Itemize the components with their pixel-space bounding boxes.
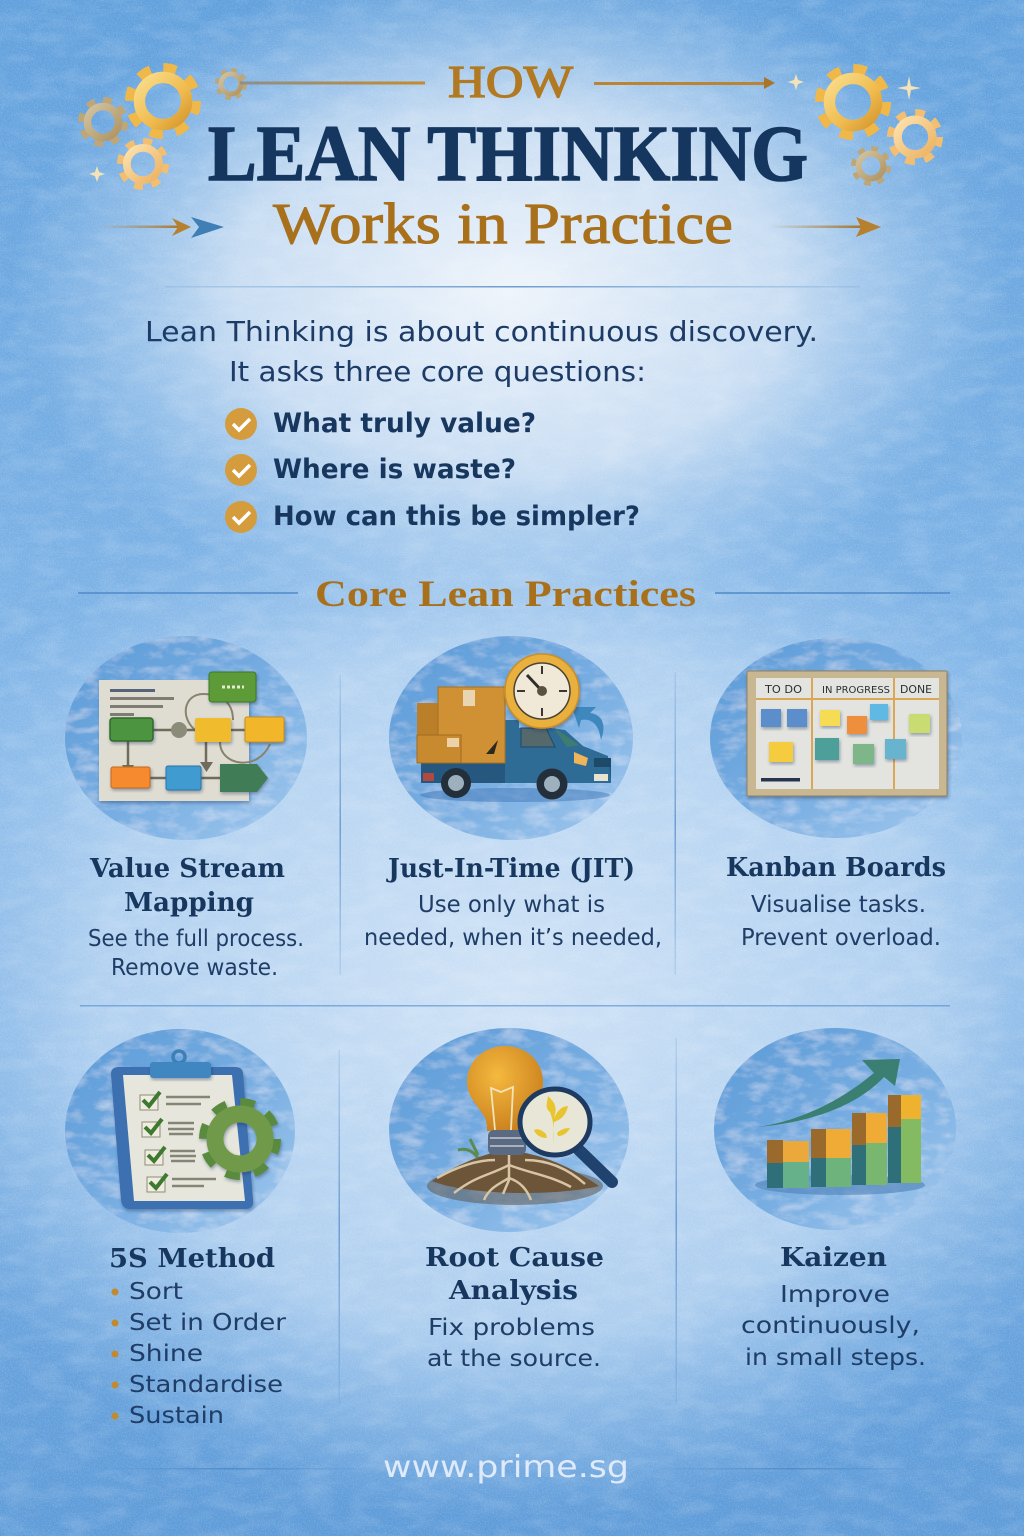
card title: Kanban Boards xyxy=(726,853,946,883)
card description: Prevent overload. xyxy=(741,925,941,951)
bullet list: Set in Order xyxy=(129,1310,287,1336)
panel: value stream mapping xyxy=(65,636,307,981)
icon: kanban board xyxy=(747,671,947,796)
card description: needed, when it’s needed, xyxy=(364,925,662,951)
card title: Kaizen xyxy=(780,1243,887,1273)
card description: Fix problems xyxy=(428,1315,595,1341)
card description: at the source. xyxy=(427,1346,601,1372)
card description: See the full process. xyxy=(88,926,304,952)
heading: Works in Practice: Works in Practice xyxy=(273,191,733,256)
card description: in small steps. xyxy=(745,1345,926,1371)
card title xyxy=(89,854,285,918)
card description: Improve xyxy=(780,1282,890,1308)
card title: Value Stream xyxy=(89,854,285,884)
icon: process map xyxy=(99,672,284,801)
arrow: top right xyxy=(594,77,775,89)
icon: check 3 xyxy=(225,501,257,533)
sparkles xyxy=(89,74,921,182)
section heading: Core Lean Practices xyxy=(315,574,696,615)
card title: 5S Method xyxy=(109,1244,275,1274)
card description xyxy=(741,892,941,951)
bullet list: Shine xyxy=(129,1341,203,1367)
panel: kaizen xyxy=(714,1028,956,1371)
title block xyxy=(82,56,939,256)
card description: Remove waste. xyxy=(111,955,278,981)
bullet list: Sort xyxy=(129,1279,183,1305)
icon: rising bar chart with arrow xyxy=(755,1059,925,1195)
icon: check 1 xyxy=(225,408,257,440)
card description xyxy=(364,892,662,951)
question 2: Where is waste? xyxy=(273,454,516,485)
card description xyxy=(88,926,304,981)
icon: check 2 xyxy=(225,454,257,486)
icon: kanban board: TO DO xyxy=(764,684,802,696)
dividers xyxy=(80,672,950,1405)
icon: kanban board: DONE xyxy=(900,684,932,696)
card title: Just-In-Time (JIT) xyxy=(386,854,635,884)
icon: clipboard with gear xyxy=(111,1051,275,1209)
icon: light bulb, roots, magnifier xyxy=(427,1046,612,1205)
gear xyxy=(205,1104,275,1174)
panel: just in time xyxy=(364,636,662,951)
card description xyxy=(427,1315,601,1372)
question list xyxy=(225,408,640,533)
arrow: lower left with chevron xyxy=(97,217,224,238)
bullet list: Standardise xyxy=(129,1372,283,1398)
icon: kanban board: IN PROGRESS xyxy=(822,685,890,696)
bullet list: Sustain xyxy=(129,1403,224,1429)
gears left cluster xyxy=(82,69,244,186)
intro text: Lean Thinking is about continuous discovery. xyxy=(145,315,818,348)
card description: Use only what is xyxy=(418,892,605,918)
panel: 5S method xyxy=(65,1029,295,1429)
card description: continuously, xyxy=(741,1313,920,1339)
arrow: top left line xyxy=(240,82,425,84)
rule xyxy=(165,286,860,288)
arrow: lower right xyxy=(769,217,881,237)
card title: Analysis xyxy=(448,1276,578,1306)
gears right cluster xyxy=(821,70,939,183)
icon: delivery truck with clock xyxy=(417,654,611,802)
card description xyxy=(741,1282,926,1371)
panel: root cause analysis xyxy=(389,1028,629,1372)
intro text xyxy=(145,315,818,388)
card title: Mapping xyxy=(124,888,254,918)
question 1: What truly value? xyxy=(273,408,536,439)
intro text: It asks three core questions: xyxy=(229,355,646,388)
heading: HOW: HOW xyxy=(448,56,574,107)
card title xyxy=(425,1243,604,1306)
website url: www.prime.sg xyxy=(383,1450,629,1485)
card description: Visualise tasks. xyxy=(751,892,926,918)
panel: kanban boards xyxy=(710,638,962,951)
bullet list xyxy=(112,1279,287,1429)
question 3: How can this be simpler? xyxy=(273,501,640,532)
heading: LEAN THINKING: LEAN THINKING xyxy=(208,111,808,198)
card title: Root Cause xyxy=(425,1243,604,1273)
